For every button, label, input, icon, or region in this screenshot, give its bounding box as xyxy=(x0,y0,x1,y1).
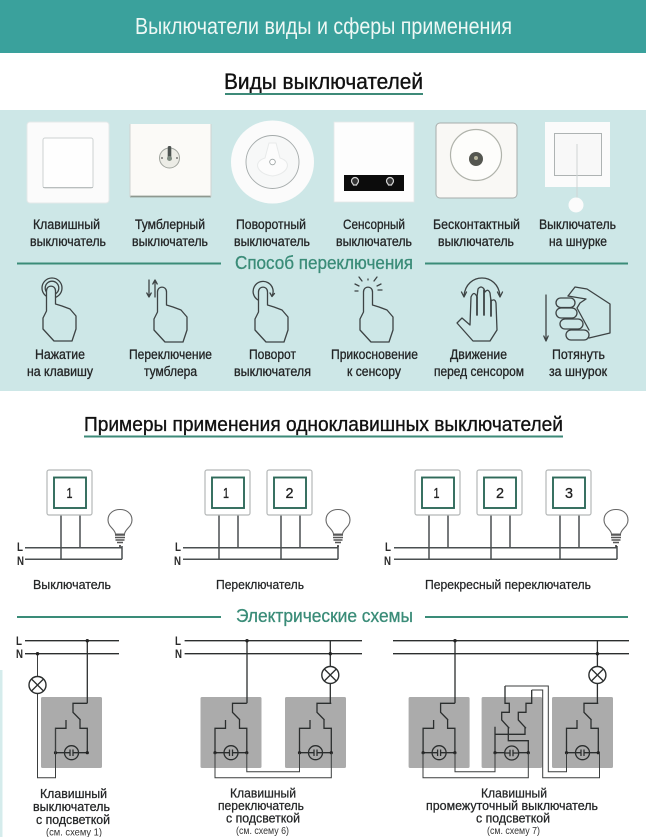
title: Выключатели виды и сферы применения xyxy=(135,13,512,39)
label: pull-cord switch xyxy=(539,217,616,249)
diagram: two-way switch: Переключатель xyxy=(216,577,304,592)
label: toggle xyxy=(129,347,212,379)
label: toggle switch: выключатель xyxy=(132,234,208,249)
schematic: backlit intermediate switch: с подсветкой xyxy=(476,810,550,826)
label: pull-cord switch: Выключатель xyxy=(539,217,616,232)
diagram: cross switch xyxy=(384,470,628,592)
label: wave: перед сенсором xyxy=(434,364,524,379)
schematic: backlit two-way switch: L xyxy=(175,634,181,648)
label: toggle switch: Тумблерный xyxy=(135,217,205,232)
schematic: backlit two-way switch: переключатель xyxy=(218,798,304,813)
diagram: single switch: Выключатель xyxy=(33,577,111,592)
label: pull-cord switch: на шнурке xyxy=(549,234,607,249)
diagram: cross switch: N xyxy=(384,554,391,568)
schematic: backlit two-way switch xyxy=(175,634,362,837)
diagram: single switch: N xyxy=(17,554,24,568)
schematic: backlit rocker switch: Клавишный xyxy=(40,786,107,801)
label: rocker switch xyxy=(30,217,106,249)
label: rotary switch: выключатель xyxy=(234,234,310,249)
label: rotary switch: Поворотный xyxy=(236,217,306,232)
label: rotate: выключателя xyxy=(234,364,311,379)
diagram: cross switch: L xyxy=(385,540,391,554)
label: toggle: тумблера xyxy=(144,364,197,379)
icon: toggle hand xyxy=(147,280,187,342)
schematic: backlit rocker switch: с подсветкой xyxy=(36,812,110,827)
label: rotate xyxy=(234,347,311,379)
label: touch switch: Сенсорный xyxy=(343,217,405,232)
icon: press hand xyxy=(42,278,76,341)
icon: wave hand xyxy=(457,278,502,341)
label: rotate: Поворот xyxy=(249,347,296,362)
diagram: two-way switch: L xyxy=(175,540,181,554)
icon: toggle switch xyxy=(130,124,211,197)
schematic: backlit rocker switch xyxy=(16,634,119,837)
label: contactless switch: выключатель xyxy=(438,234,514,249)
diagram: single switch: 1 xyxy=(66,485,72,502)
diagram: two-way switch: 1 xyxy=(223,485,229,502)
diagram: two-way switch: N xyxy=(174,554,181,568)
heading: types of switches: Виды выключателей xyxy=(224,69,423,94)
label: contactless switch xyxy=(433,217,520,249)
panel: switch types and operation xyxy=(0,110,646,391)
schematic: backlit intermediate switch: промежуточный выключатель xyxy=(426,798,598,813)
icon: rocker switch xyxy=(27,122,109,203)
schematic: backlit intermediate switch: Клавишный xyxy=(481,786,547,800)
diagram: cross switch: 3 xyxy=(565,485,573,502)
diagram: two-way switch: 2 xyxy=(286,485,294,502)
label: press xyxy=(27,347,93,379)
diagram: single switch xyxy=(17,470,132,592)
schematic: backlit rocker switch: выключатель xyxy=(33,799,110,814)
label: touch: Прикосновение xyxy=(331,347,418,362)
icon: contactless switch xyxy=(436,123,517,198)
decorative left strip xyxy=(0,670,2,837)
schematic: backlit two-way switch: N xyxy=(175,647,182,661)
schematic: backlit rocker switch: L xyxy=(16,634,22,648)
label: press: Нажатие xyxy=(35,347,85,362)
diagram: single switch: L xyxy=(17,540,23,554)
label: rocker switch: выключатель xyxy=(30,234,106,249)
section heading: switching method: Способ переключения xyxy=(235,253,413,273)
icon: pulling fist xyxy=(544,287,610,341)
section heading: electrical diagrams: Электрические схемы xyxy=(236,606,413,626)
diagram: two-way switch xyxy=(174,470,350,592)
header banner xyxy=(0,0,646,53)
icon: rotary switch xyxy=(231,120,314,204)
label: rocker switch: Клавишный xyxy=(33,217,100,232)
icon: touch switch xyxy=(334,122,414,202)
label: pull xyxy=(549,347,607,379)
label: wave xyxy=(434,347,524,379)
schematic: backlit rocker switch: N xyxy=(16,647,23,661)
label: wave: Движение xyxy=(450,347,507,362)
diagram: cross switch: Перекресный переключатель xyxy=(425,577,591,592)
label: contactless switch: Бесконтактный xyxy=(433,217,520,232)
label: touch switch: выключатель xyxy=(336,234,412,249)
label: toggle switch xyxy=(132,217,208,249)
icon: pull-cord switch xyxy=(545,122,610,212)
schematic: backlit intermediate switch: (см. схему 7) xyxy=(487,825,540,837)
schematic: backlit intermediate switch xyxy=(393,639,629,837)
schematic: backlit two-way switch: с подсветкой xyxy=(226,810,300,826)
diagram: cross switch: 1 xyxy=(434,485,440,502)
heading: application examples: Примеры применения одноклавишных выключателей xyxy=(84,414,563,436)
label: pull: за шнурок xyxy=(549,364,607,379)
label: touch: к сенсору xyxy=(347,364,401,379)
label: press: на клавишу xyxy=(27,364,93,379)
label: touch xyxy=(331,347,418,379)
schematic: backlit two-way switch: Клавишный xyxy=(230,786,296,800)
schematic: backlit two-way switch: (см. схему 6) xyxy=(236,825,289,837)
label: rotary switch xyxy=(234,217,310,249)
diagram: cross switch: 2 xyxy=(496,485,504,502)
label: touch switch xyxy=(336,217,412,249)
icon: rotate hand xyxy=(253,281,288,342)
label: pull: Потянуть xyxy=(552,347,605,362)
icon: touch hand xyxy=(355,277,393,342)
label: toggle: Переключение xyxy=(129,347,212,362)
